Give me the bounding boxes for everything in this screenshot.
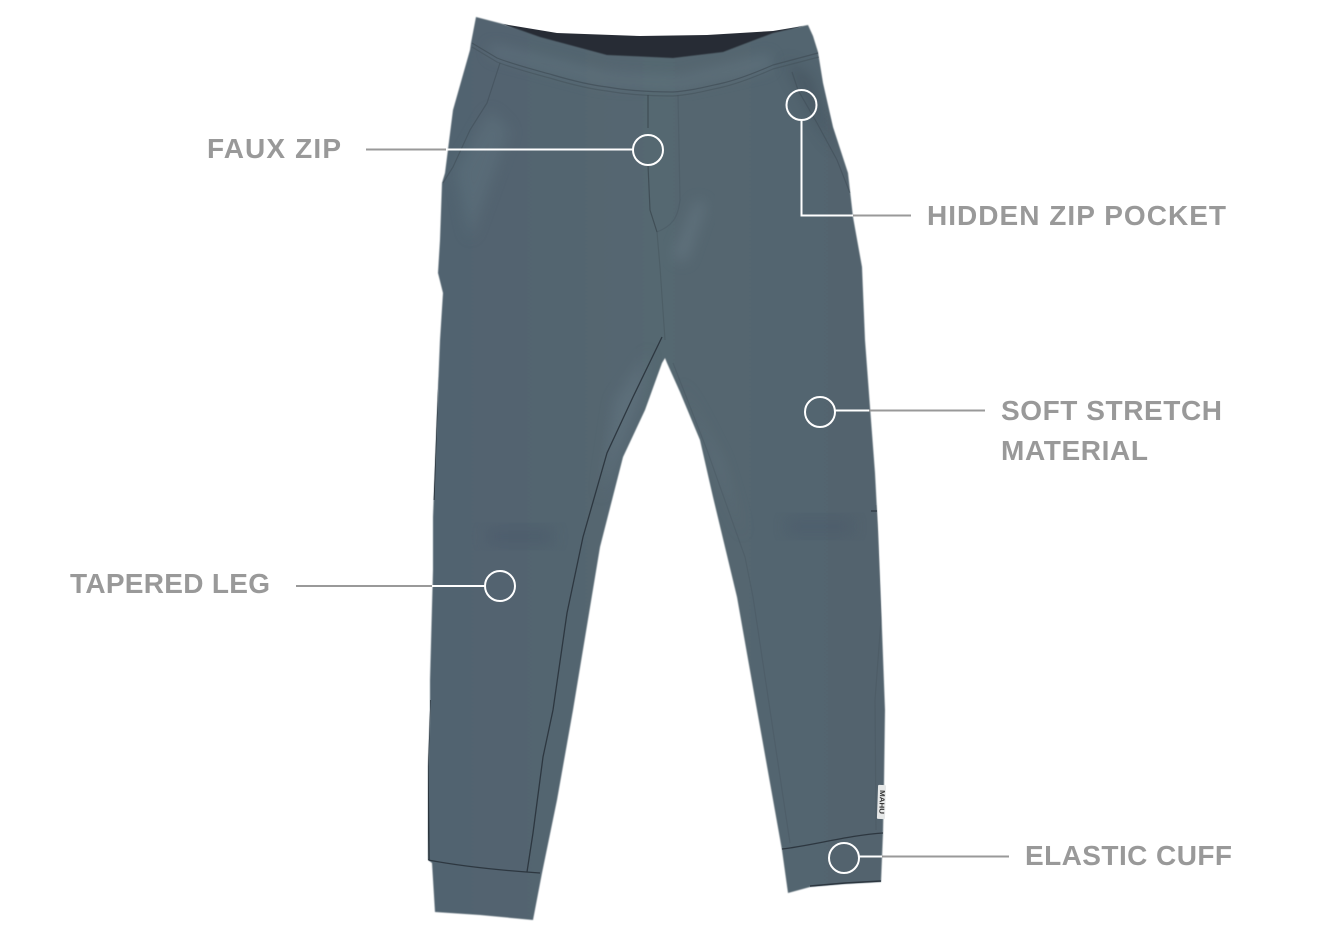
inner waistband lining bbox=[503, 24, 803, 61]
callout: faux zip bbox=[207, 133, 663, 165]
label: elastic cuff: ELASTIC CUFF bbox=[1025, 840, 1232, 871]
leader line: faux zip bbox=[366, 135, 663, 165]
leader line: hidden zip pocket bbox=[786, 90, 911, 216]
callout: elastic cuff bbox=[829, 840, 1232, 873]
illustration: pants bbox=[428, 17, 886, 920]
label: hidden zip pocket: HIDDEN ZIP POCKET bbox=[927, 200, 1226, 231]
label: faux zip: FAUX ZIP bbox=[207, 133, 341, 164]
fabric shading bbox=[455, 45, 853, 545]
label: tapered leg: TAPERED LEG bbox=[70, 568, 270, 599]
seams and stitching bbox=[428, 43, 883, 886]
callout: soft stretch material bbox=[805, 395, 1222, 466]
brand tag: MAHU bbox=[877, 790, 885, 814]
callout: tapered leg bbox=[70, 568, 515, 601]
label: soft stretch material: SOFT STRETCH bbox=[1001, 395, 1222, 426]
callout: soft stretch material: MATERIAL bbox=[1001, 435, 1148, 466]
callout: hidden zip pocket bbox=[786, 90, 1226, 231]
pants body bbox=[428, 17, 885, 920]
leader line: soft stretch material bbox=[805, 397, 985, 427]
brand tag bbox=[877, 785, 886, 819]
leader line: elastic cuff bbox=[829, 843, 1009, 873]
leader line: tapered leg bbox=[296, 571, 515, 601]
